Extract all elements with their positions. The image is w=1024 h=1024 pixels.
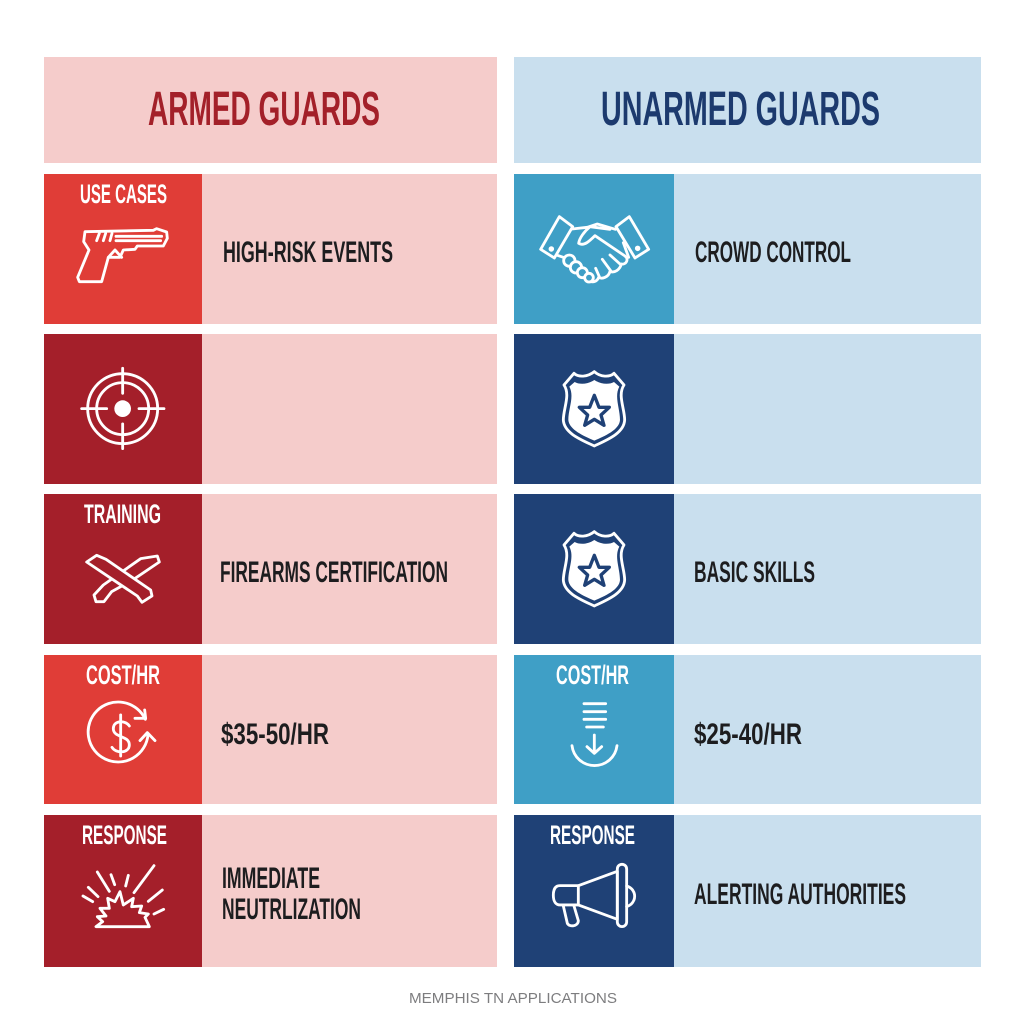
text: immediate neutralization (222, 862, 361, 926)
icon: handshake (541, 217, 649, 282)
panel: unarmed crowd control row (514, 174, 981, 324)
icon: megaphone (553, 864, 635, 927)
text: armed cost value: $35-50/HR (221, 718, 329, 751)
panel: armed training row (44, 494, 497, 644)
panel: armed response row (44, 815, 497, 967)
text: unarmed cost value: $25-40/HR (694, 718, 802, 751)
icon: dollar cycle (88, 702, 155, 762)
text: immediate neutralization: NEUTRLIZATION (222, 893, 361, 926)
text: firearms certification: FIREARMS CERTIFICATION (220, 556, 448, 589)
text: high-risk events: HIGH-RISK EVENTS (223, 236, 393, 269)
icon: police badge (563, 372, 625, 446)
panel: armed guards header (44, 57, 497, 163)
text: crowd control: CROWD CONTROL (695, 236, 851, 269)
label: response: RESPONSE (82, 820, 167, 850)
heading: armed guards: ARMED GUARDS (148, 83, 380, 136)
icon: crossed pistols (87, 555, 159, 602)
icon: pistol (78, 229, 167, 282)
label: cost per hour: COST/HR (86, 660, 160, 690)
label: use cases: USE CASES (80, 179, 167, 209)
panel: unarmed response row (514, 815, 981, 967)
panel: unarmed badge row (514, 334, 981, 484)
panel: unarmed basic skills row (514, 494, 981, 644)
footer: MEMPHIS TN APPLICATIONS (409, 990, 617, 1007)
label: response: RESPONSE (550, 820, 635, 850)
text: basic skills: BASIC SKILLS (694, 556, 815, 589)
panel: unarmed guards header (514, 57, 981, 163)
label: training: TRAINING (84, 499, 161, 529)
label: cost per hour: COST/HR (556, 660, 629, 690)
panel: armed use cases row (44, 174, 497, 324)
text: immediate neutralization: IMMEDIATE (222, 862, 320, 895)
icon: down arrow with stacked lines (572, 704, 617, 766)
panel: unarmed cost row (514, 655, 981, 804)
icon: police badge (563, 532, 625, 606)
icon: target crosshair (82, 368, 164, 449)
panel: armed target row (44, 334, 497, 484)
panel: armed cost row (44, 655, 497, 804)
icon: explosion (83, 866, 164, 927)
